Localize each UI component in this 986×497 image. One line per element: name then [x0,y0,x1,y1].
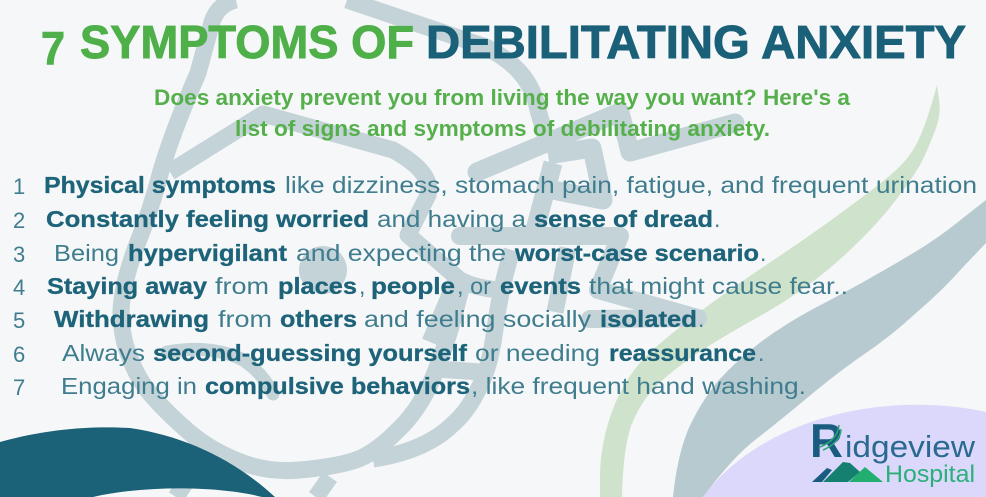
symptom 4: that might cause fear.. [589,273,848,299]
symptom 3: 3 [13,242,25,267]
subtitle [154,85,851,141]
symptom 5: others [280,306,357,332]
symptom 3: worst-case scenario [514,240,759,266]
symptom 4: events [500,273,581,299]
symptom 2: Constantly feeling worried [46,206,369,232]
symptom 3: . [760,240,766,266]
symptom 4 [13,273,848,300]
symptom 4: places [278,273,357,299]
symptom 1: Physical symptoms [44,172,276,198]
logo: Ridgeview Hospital: idgeview [845,429,976,464]
symptom 3: hypervigilant [128,240,287,266]
symptom 5: 5 [13,308,25,333]
title: DEBILITATING ANXIETY [426,16,966,68]
title: 7 [41,22,65,74]
symptom 6 [13,340,764,367]
symptom 7: , like frequent hand washing. [471,373,806,399]
subtitle: list of signs and symptoms of debilitating anxiety. [235,116,770,141]
symptom 1: like dizziness, stomach pain, fatigue, and frequent urination [285,172,977,198]
symptom 6: reassurance [609,340,756,366]
symptom 6: Always [62,340,145,366]
lilac corner [703,405,986,497]
symptom 4: , or [457,273,491,299]
symptom 2: . [714,206,720,232]
symptom 4: from [215,273,269,299]
symptom 3 [13,240,766,267]
symptom 3: and expecting the [296,240,506,266]
symptom 6: 6 [13,342,25,367]
subtitle: Does anxiety prevent you from living the way you want? Here's a [154,85,851,110]
symptom 2 [13,206,720,233]
background illustration: head with tangled mind [121,0,735,497]
symptom 2: 2 [13,208,25,233]
symptom list [13,172,977,400]
symptom 7: 7 [13,375,25,400]
symptom 5: from [218,306,272,332]
logo: Ridgeview Hospital: R [810,414,843,467]
symptom 2: and having a [377,206,526,232]
symptom 7: compulsive behaviors [205,373,470,399]
symptom 2: sense of dread [534,206,713,232]
symptom 4: 4 [13,275,25,300]
logo: Ridgeview Hospital [810,414,976,488]
symptom 5 [13,306,704,333]
symptom 5: and feeling socially [364,306,592,332]
dark teal corner shape [0,427,275,497]
symptom 5: . [698,306,704,332]
title [41,16,966,74]
symptom 1: 1 [13,174,25,199]
title: SYMPTOMS OF [80,16,414,68]
symptom 1 [13,172,977,199]
blue-grey swoosh [673,200,986,497]
symptom 7 [13,373,806,400]
green swoosh [600,85,940,497]
symptom 4: people [371,273,455,299]
symptom 5: Withdrawing [54,306,209,332]
logo: Ridgeview Hospital: Hospital [885,461,975,488]
symptom 6: or needing [475,340,600,366]
symptom 4: Staying away [47,273,207,299]
symptom 7: Engaging in [61,373,197,399]
symptom 5: isolated [600,306,697,332]
symptom 3: Being [54,240,119,266]
symptom 4: , [359,273,365,299]
symptom 6: . [758,340,764,366]
symptom 6: second-guessing yourself [153,340,467,366]
